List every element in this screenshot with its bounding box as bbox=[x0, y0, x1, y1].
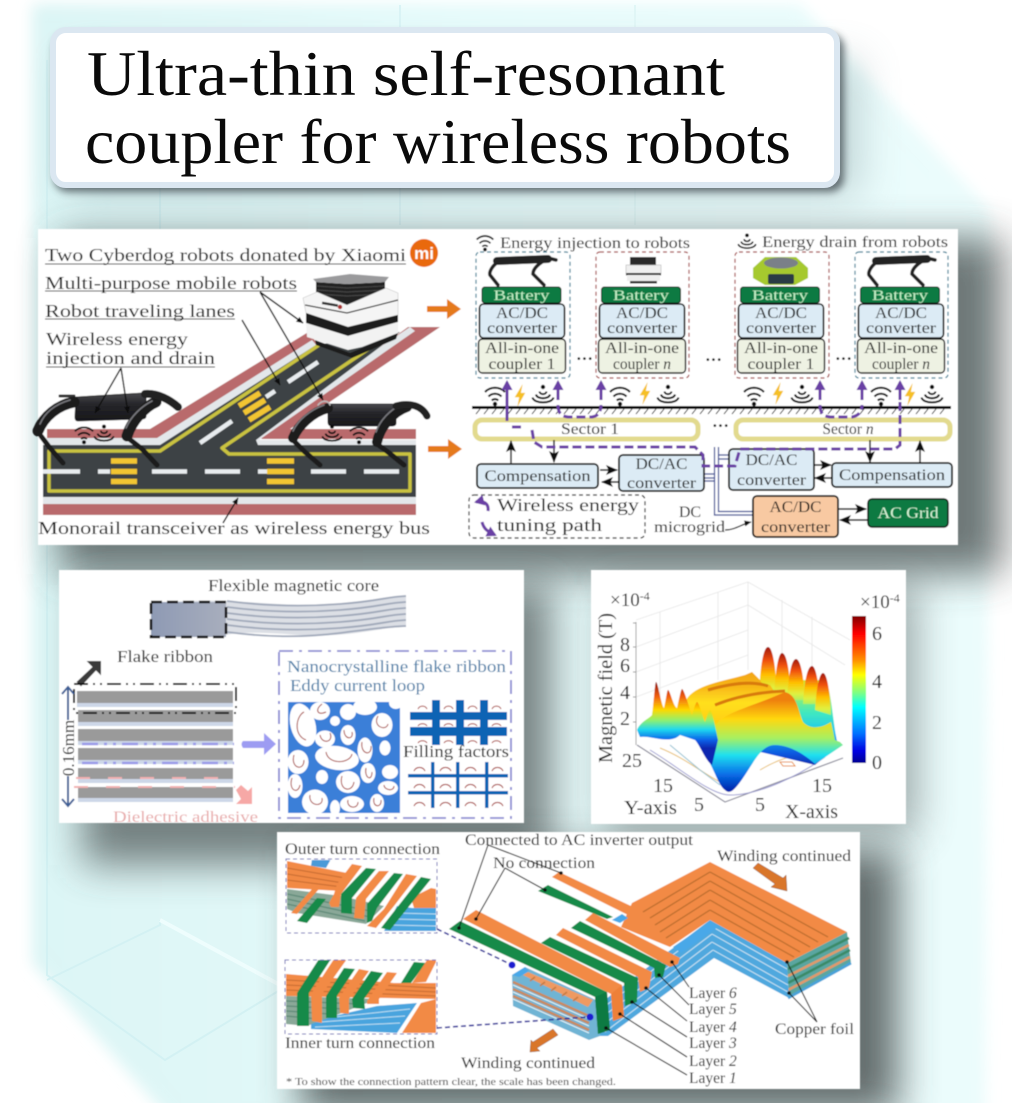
legend: energy injection: Energy injection to robots bbox=[500, 235, 690, 252]
robot unit 4: dog with coupler n: converter bbox=[866, 320, 937, 337]
sector 1 rail bbox=[475, 420, 698, 439]
dimension: 0.16mm: 0.16mm bbox=[59, 720, 78, 776]
robot unit 3: green robot with coupler 1: coupler 1 bbox=[748, 356, 814, 373]
colour bar: 6 bbox=[872, 623, 882, 645]
compensation left: Compensation bbox=[484, 468, 590, 485]
coil: stack walls bbox=[512, 920, 851, 1040]
label: flake ribbon: Flake ribbon bbox=[117, 647, 213, 666]
robot unit 2: mobile robot with coupler n: coupler n bbox=[613, 356, 671, 373]
detail box: nanocrystalline flake ribbon: Nanocrystalline flake ribbon bbox=[287, 657, 506, 676]
robot unit 3: green robot with coupler 1: Battery bbox=[752, 288, 809, 304]
DC/AC converter left bbox=[619, 455, 704, 492]
DC/AC converter left: DC/AC bbox=[636, 456, 688, 473]
labels: winding structure: No connection bbox=[493, 855, 595, 872]
ellipsis dots: ··· bbox=[835, 349, 852, 368]
floor axis labels: 15 bbox=[812, 775, 832, 797]
floor axis labels: Y-axis bbox=[624, 797, 677, 819]
y-axis title and ticks: 8 bbox=[620, 634, 630, 656]
arrow: to detail bbox=[242, 733, 276, 755]
robot unit 2: mobile robot with coupler n: converter bbox=[607, 320, 678, 337]
footnote: * To show the connection pattern clear, the scale has been changed. bbox=[286, 1077, 616, 1088]
label: DC microgrid: DC bbox=[679, 504, 701, 521]
dimension: 0.16mm bbox=[59, 687, 78, 806]
labels: robot lanes illustration: injection and drain bbox=[46, 348, 215, 368]
arrow: winding continued top bbox=[753, 863, 787, 891]
leader lines bbox=[459, 845, 817, 1075]
robot unit 2: mobile robot with coupler n bbox=[596, 252, 689, 378]
y-axis title and ticks: Magnetic field (T) bbox=[595, 613, 617, 763]
y-axis title and ticks: 6 bbox=[620, 655, 630, 677]
labels: winding structure: Winding continued bbox=[717, 848, 851, 865]
detail box: nanocrystalline flake ribbon: Eddy current loop bbox=[290, 676, 425, 695]
robot unit 1: dog with coupler 1: All-in-one bbox=[485, 340, 559, 357]
labels: winding structure bbox=[461, 832, 854, 1087]
label: DC microgrid bbox=[654, 504, 725, 536]
icons: wireless and bolt row bbox=[485, 382, 942, 407]
y-axis title and ticks: 4 bbox=[620, 682, 630, 704]
floor axis labels: 15 bbox=[653, 775, 673, 797]
robot unit 4: dog with coupler n: coupler n bbox=[872, 356, 930, 373]
DC/AC converter left: converter bbox=[627, 475, 697, 492]
compensation left bbox=[477, 464, 598, 488]
inset: outer turn connection: Outer turn connection bbox=[285, 841, 440, 858]
icon: Xiaomi logo bbox=[410, 239, 438, 267]
floor axis labels: 5 bbox=[755, 794, 765, 816]
robot unit 3: green robot with coupler 1: AC/DC bbox=[755, 305, 807, 322]
panel: robot lanes and energy bus system bbox=[38, 229, 958, 545]
colour bar bbox=[852, 591, 900, 774]
floor axis labels bbox=[622, 750, 838, 823]
arrow: dielectric adhesive pointer bbox=[236, 785, 252, 804]
annotation arrows bbox=[95, 292, 323, 523]
labels: winding structure: Layer 5 bbox=[689, 1001, 737, 1018]
dashed inset connectors bbox=[437, 929, 594, 1028]
sector 1 rail: Sector 1 bbox=[561, 421, 619, 438]
DC microgrid bus lines bbox=[704, 447, 753, 515]
colour bar: -4 bbox=[890, 591, 900, 605]
labels: winding structure: Layer 4 bbox=[689, 1019, 737, 1036]
surface: back right base bbox=[752, 680, 838, 765]
panel: flexible magnetic core bbox=[59, 570, 524, 826]
power flow arrows bbox=[511, 440, 920, 530]
DC/AC converter right: converter bbox=[737, 472, 807, 489]
sector n rail: Sector n bbox=[822, 421, 874, 438]
robot unit 2: mobile robot with coupler n: AC/DC bbox=[616, 305, 668, 322]
colour bar: ×10 bbox=[860, 592, 890, 613]
wireless energy tuning path bbox=[507, 382, 900, 466]
robot unit 1: dog with coupler 1: Battery bbox=[494, 288, 550, 304]
icon: cyberdog robot right bbox=[293, 401, 427, 465]
inset: outer turn connection bbox=[285, 841, 440, 933]
surface: back right peaks bbox=[759, 647, 831, 715]
surface: front body bbox=[705, 692, 843, 792]
AC/DC converter grid side bbox=[753, 496, 838, 537]
title bbox=[53, 30, 837, 185]
robot unit 2: mobile robot with coupler n: All-in-one bbox=[605, 340, 679, 357]
eddy current cell map bbox=[285, 697, 403, 816]
legend: wireless energy tuning path: Wireless energy bbox=[497, 495, 639, 515]
labels: robot lanes illustration bbox=[38, 245, 430, 538]
y-axis title and ticks: 2 bbox=[620, 708, 630, 730]
robot unit 3: green robot with coupler 1: All-in-one bbox=[744, 340, 818, 357]
heading: flexible magnetic core: Flexible magnetic core bbox=[208, 576, 379, 595]
arrow: orange lower bbox=[428, 439, 462, 459]
robot unit 1: dog with coupler 1: AC/DC bbox=[496, 305, 548, 322]
ground line bbox=[472, 408, 951, 414]
AC/DC converter grid side: AC/DC bbox=[770, 499, 822, 516]
coil: chevron top surface bbox=[612, 862, 847, 963]
detail box: nanocrystalline flake ribbon bbox=[279, 651, 511, 818]
ellipsis dots bbox=[576, 349, 852, 435]
colour bar: 2 bbox=[872, 712, 882, 734]
arrow: flake ribbon pointer bbox=[78, 662, 100, 685]
panel: magnetic field 3D surface bbox=[591, 570, 906, 824]
floor contours bbox=[650, 745, 825, 795]
DC/AC converter right: DC/AC bbox=[746, 452, 798, 469]
icon: wavy ribbon core bbox=[151, 596, 406, 637]
thick filling-factor grid bbox=[410, 700, 507, 745]
surface: left peaks bbox=[637, 682, 718, 765]
robot unit 4: dog with coupler n: All-in-one bbox=[864, 340, 938, 357]
robot unit 4: dog with coupler n: AC/DC bbox=[875, 305, 927, 322]
colour bar: 0 bbox=[872, 752, 882, 774]
inset: inner turn connection bbox=[285, 959, 437, 1052]
sector n rail bbox=[736, 420, 950, 439]
icons: wireless signals on road bbox=[75, 425, 368, 444]
label: dielectric adhesive: Dielectric adhesive bbox=[113, 809, 258, 826]
arrow: orange upper bbox=[427, 299, 461, 319]
robot unit 3: green robot with coupler 1: converter bbox=[746, 320, 817, 337]
AC grid bbox=[868, 499, 948, 527]
y-axis title and ticks: ×10 bbox=[610, 590, 640, 611]
thin filling-factor grid bbox=[408, 762, 508, 808]
labels: winding structure: Winding continued bbox=[461, 1055, 595, 1072]
labels: robot lanes illustration: Robot traveling lanes bbox=[45, 301, 235, 321]
illustration: robot traveling lanes bbox=[43, 327, 440, 515]
title: coupler for wireless robots bbox=[85, 107, 791, 177]
legend: wireless energy tuning path: tuning path bbox=[497, 515, 602, 535]
legend: energy drain: Energy drain from robots bbox=[762, 234, 948, 251]
arrow: winding continued bottom bbox=[530, 1029, 558, 1052]
robot unit 4: dog with coupler n: Battery bbox=[872, 288, 929, 304]
floor axis labels: 5 bbox=[694, 794, 704, 816]
y-axis title and ticks bbox=[595, 589, 650, 763]
robot unit 2: mobile robot with coupler n: Battery bbox=[613, 288, 670, 304]
AC/DC converter grid side: converter bbox=[761, 519, 831, 536]
inset: inner turn connection: Inner turn connection bbox=[285, 1035, 435, 1052]
robot unit 1: dog with coupler 1: converter bbox=[487, 320, 558, 337]
labels: winding structure: Layer 6 bbox=[689, 985, 737, 1002]
labels: robot lanes illustration: Two Cyberdog robots donated by Xiaomi bbox=[45, 245, 406, 265]
icon: Xiaomi logo: mi bbox=[414, 244, 434, 263]
labels: robot lanes illustration: Monorail transceiver as wireless energy bus bbox=[38, 518, 430, 538]
labels: winding structure: Layer 3 bbox=[689, 1035, 737, 1052]
ellipsis dots: ··· bbox=[705, 350, 722, 369]
labels: winding structure: Layer 1 bbox=[689, 1070, 737, 1087]
legend: wireless energy tuning path bbox=[469, 495, 645, 538]
robot unit 1: dog with coupler 1: coupler 1 bbox=[488, 356, 556, 373]
compensation right bbox=[832, 463, 952, 487]
robot unit 4: dog with coupler n bbox=[855, 252, 948, 378]
compensation right: Compensation bbox=[839, 467, 945, 484]
labels: winding structure: Layer 2 bbox=[689, 1053, 737, 1070]
label: filling factors: Filling factors bbox=[403, 742, 509, 761]
surface: back ridges bbox=[686, 672, 790, 745]
ellipsis dots: ··· bbox=[712, 416, 729, 435]
AC grid: AC Grid bbox=[878, 505, 938, 522]
DC/AC converter right bbox=[729, 449, 814, 490]
icon: multi-purpose mobile robot bbox=[303, 274, 398, 358]
coil: lead strips bbox=[449, 872, 680, 1034]
floor axis labels: X-axis bbox=[785, 801, 838, 823]
ribbon layer stack bbox=[74, 684, 236, 802]
floor axis labels: 25 bbox=[622, 750, 642, 772]
label: DC microgrid: microgrid bbox=[654, 519, 725, 536]
y-axis title and ticks: -4 bbox=[640, 589, 650, 603]
leader dots bbox=[457, 871, 791, 1030]
colour bar: 4 bbox=[872, 671, 882, 693]
robot unit 3: green robot with coupler 1 bbox=[735, 252, 829, 378]
labels: winding structure: Copper foil bbox=[775, 1021, 854, 1038]
title: Ultra-thin self-resonant bbox=[87, 39, 726, 109]
icon: cyberdog robot left bbox=[38, 393, 178, 465]
labels: robot lanes illustration: Multi-purpose mobile robots bbox=[45, 273, 297, 293]
robot unit 1: dog with coupler 1 bbox=[476, 252, 570, 378]
ellipsis dots: ··· bbox=[576, 349, 593, 368]
panel: winding structure bbox=[277, 832, 860, 1089]
labels: robot lanes illustration: Wireless energy bbox=[46, 329, 188, 349]
labels: winding structure: Connected to AC inverter output bbox=[465, 832, 694, 849]
axes and grid bbox=[633, 582, 850, 802]
